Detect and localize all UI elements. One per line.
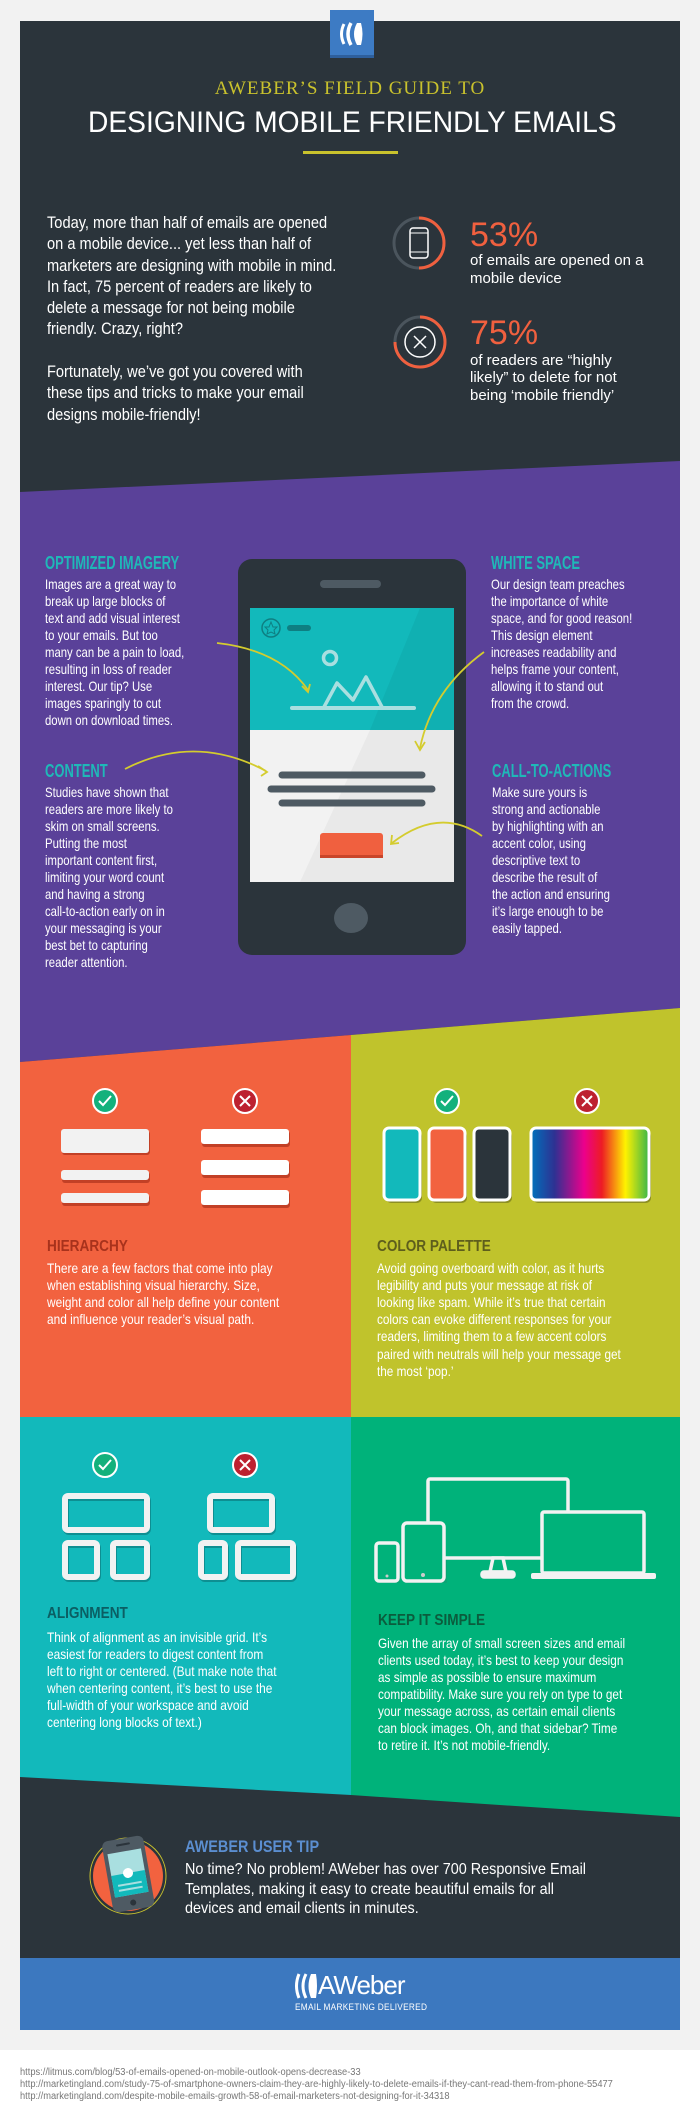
text: white space: helps frame your content, [491, 661, 619, 677]
stat 75%: likely” to delete for not [470, 369, 617, 386]
text: hierarchy: There are a few factors that come into play [47, 1260, 273, 1276]
footer logo: AWeber [318, 1970, 404, 2000]
arrow: imagery [216, 642, 311, 694]
text: optimized imagery: resulting in loss of reader [45, 661, 172, 677]
text: hierarchy: and influence your reader’s visual path. [47, 1311, 254, 1327]
text: optimized imagery: many can be a pain to load, [45, 644, 184, 660]
logo top [330, 10, 374, 58]
text: optimized imagery: interest. Our tip? Use [45, 678, 152, 694]
text: alignment: full-width of your workspace and avoid [47, 1697, 249, 1713]
stat 53%: mobile device [470, 270, 562, 286]
text: color palette: paired with neutrals will help your message get [377, 1346, 621, 1362]
source links: http://marketingland.com/despite-mobile-emails-growth-58-of-email-marketers-not-designing-for-it-34318 [20, 2091, 450, 2102]
text: alignment [47, 1628, 277, 1730]
footer logo: EMAIL MARKETING DELIVERED [295, 2002, 427, 2012]
text: alignment: when centering content, it’s best to use the [47, 1680, 272, 1696]
panel: color palette [377, 1088, 651, 1379]
arrow: white space [414, 651, 484, 752]
heading: white space: WHITE SPACE [491, 553, 580, 573]
icons: palette good vs bad [382, 1088, 651, 1203]
text: call-to-actions [492, 784, 610, 936]
stat 75% [394, 314, 617, 404]
text: optimized imagery: break up large blocks of [45, 593, 165, 609]
text: content: and having a strong [45, 886, 145, 902]
text: color palette: Avoid going overboard with color, as it hurts [377, 1260, 604, 1276]
text: color palette: readers, limiting them to a few accent colors [377, 1328, 606, 1344]
text: color palette: colors can evoke different responses for your [377, 1311, 611, 1327]
icon: phone ring [392, 216, 446, 270]
text: color palette: looking like spam. While it’s true that certain [377, 1294, 606, 1310]
text: call-to-actions: strong and actionable [492, 801, 600, 817]
intro text: Fortunately, we’ve got you covered with [47, 362, 303, 381]
text: keep it simple [378, 1634, 625, 1753]
text: content: reader attention. [45, 954, 128, 970]
intro text: these tips and tricks to make your email [47, 383, 304, 402]
text: optimized imagery: to your emails. But too [45, 627, 158, 643]
heading: call-to-actions: CALL-TO-ACTIONS [492, 761, 611, 781]
text: call-to-actions: it’s large enough to be [492, 903, 603, 919]
heading: hierarchy: HIERARCHY [47, 1238, 128, 1255]
text: white space: increases readability and [491, 644, 616, 660]
stat 75%: being ‘mobile friendly’ [470, 387, 614, 404]
text: content: readers are more likely to [45, 801, 173, 817]
text: content: best bet to capturing [45, 937, 148, 953]
text: keep it simple: compatibility. Make sure you rely on type to get [378, 1686, 622, 1702]
heading: color palette: COLOR PALETTE [377, 1238, 491, 1255]
title small: AWEBER’S FIELD GUIDE TO [215, 78, 485, 99]
arrow: cta [390, 822, 482, 845]
text: alignment: left to right or centered. (But make note that [47, 1663, 277, 1679]
text: keep it simple: can block images. Oh, and that sidebar? Time [378, 1720, 617, 1736]
text: user tip [185, 1861, 586, 1917]
text: call-to-actions: the action and ensuring [492, 886, 610, 902]
text: content: Putting the most [45, 835, 127, 851]
text: keep it simple: clients used today, it’s best to keep your design [378, 1652, 623, 1668]
panel: hierarchy [47, 1088, 290, 1327]
text: content: limiting your word count [45, 869, 164, 885]
text: optimized imagery: images sparingly to cut [45, 695, 161, 711]
heading: content: CONTENT [45, 761, 108, 781]
text: white space: allowing it to stand out [491, 678, 603, 694]
text: optimized imagery: down on download times. [45, 712, 173, 728]
source links [20, 2067, 613, 2102]
title main: DESIGNING MOBILE FRIENDLY EMAILS [88, 106, 617, 139]
icon: x ring [394, 316, 446, 368]
text: keep it simple: to retire it. It’s not mobile-friendly. [378, 1737, 550, 1753]
text: call-to-actions: easily tapped. [492, 920, 562, 936]
intro text: designs mobile-friendly! [47, 405, 201, 424]
text: content [45, 784, 173, 970]
intro text: Today, more than half of emails are opened [47, 213, 327, 232]
text: white space [491, 576, 632, 711]
text: user tip: Templates, making it easy to create beautiful emails for all [185, 1880, 554, 1898]
source links: https://litmus.com/blog/53-of-emails-opened-on-mobile-outlook-opens-decrease-33 [20, 2067, 361, 2078]
stat 53%: of emails are opened on a [470, 252, 643, 269]
text: white space: the importance of white [491, 593, 608, 609]
panel: keep it simple [374, 1477, 656, 1753]
heading: optimized imagery: OPTIMIZED IMAGERY [45, 553, 179, 573]
text: white space: space, and for good reason! [491, 610, 632, 626]
text: call-to-actions: by highlighting with an [492, 818, 604, 834]
stat 53%: 53% [470, 216, 538, 254]
text: call-to-actions: accent color, using [492, 835, 586, 851]
text: hierarchy: when establishing visual hierarchy. Size, [47, 1277, 260, 1293]
text: alignment: centering long blocks of text.) [47, 1714, 202, 1730]
text: call-to-actions: describe the result of [492, 869, 597, 885]
stat 75%: 75% [470, 314, 538, 352]
phone illustration [238, 559, 466, 955]
intro text: delete a message for not being mobile [47, 298, 295, 317]
text: optimized imagery [45, 576, 184, 728]
text: keep it simple: your message across, as certain email clients [378, 1703, 615, 1719]
text: alignment: Think of alignment as an invisible grid. It’s [47, 1628, 267, 1644]
text: user tip: devices and email clients in minutes. [185, 1900, 419, 1917]
text: hierarchy [47, 1260, 280, 1327]
intro text: friendly. Crazy, right? [47, 319, 183, 338]
stat 75%: of readers are “highly [470, 352, 612, 369]
text: call-to-actions: descriptive text to [492, 852, 580, 868]
text: alignment: easiest for readers to digest content from [47, 1646, 263, 1662]
text: content: call-to-action early on in [45, 903, 165, 919]
text: white space: This design element [491, 627, 592, 643]
text: content: important content first, [45, 852, 157, 868]
heading: keep it simple: KEEP IT SIMPLE [378, 1612, 485, 1629]
intro text: In fact, 75 percent of readers are likely to [47, 277, 312, 296]
heading: alignment: ALIGNMENT [47, 1605, 128, 1622]
stat 53% [392, 216, 644, 286]
icons: hierarchy good vs bad [61, 1088, 290, 1208]
text: call-to-actions: Make sure yours is [492, 784, 587, 800]
text: optimized imagery: Images are a great way to [45, 576, 176, 592]
text: white space: from the crowd. [491, 695, 569, 711]
intro text: on a mobile device... yet less than half of [47, 234, 311, 253]
icons: alignment good vs bad [62, 1452, 297, 1582]
text: content: Studies have shown that [45, 784, 169, 800]
source links: http://marketingland.com/study-75-of-smartphone-owners-claim-they-are-highly-likely-to-delete-emails-if-they-cant-read-them-from-phone-55477 [20, 2079, 613, 2090]
intro text [47, 213, 336, 424]
panel: purple mobile tips [45, 553, 632, 970]
title underline [303, 151, 398, 154]
text: keep it simple: Given the array of small screen sizes and email [378, 1634, 625, 1650]
text: optimized imagery: text and add visual interest [45, 610, 180, 626]
heading: aweber user tip: AWEBER USER TIP [185, 1837, 319, 1856]
icon: devices [374, 1477, 656, 1583]
intro text: marketers are designing with mobile in mind. [47, 256, 336, 275]
text: content: skim on small screens. [45, 818, 160, 834]
text: hierarchy: weight and color all help define your content [47, 1294, 279, 1310]
text: white space: Our design team preaches [491, 576, 625, 592]
text: content: your messaging is your [45, 920, 162, 936]
text: color palette: legibility and puts your message at risk of [377, 1277, 592, 1293]
footer logo [295, 1970, 427, 2012]
text: color palette: the most ‘pop.’ [377, 1363, 453, 1379]
text: keep it simple: as simple as possible to ensure maximum [378, 1669, 596, 1685]
text: user tip: No time? No problem! AWeber has over 700 Responsive Email [185, 1861, 586, 1878]
arrow: content [124, 750, 268, 777]
panel: alignment [47, 1452, 297, 1730]
text: color palette [377, 1260, 621, 1379]
icon: phone in circle [90, 1836, 166, 1914]
panel: user tip [90, 1836, 586, 1917]
